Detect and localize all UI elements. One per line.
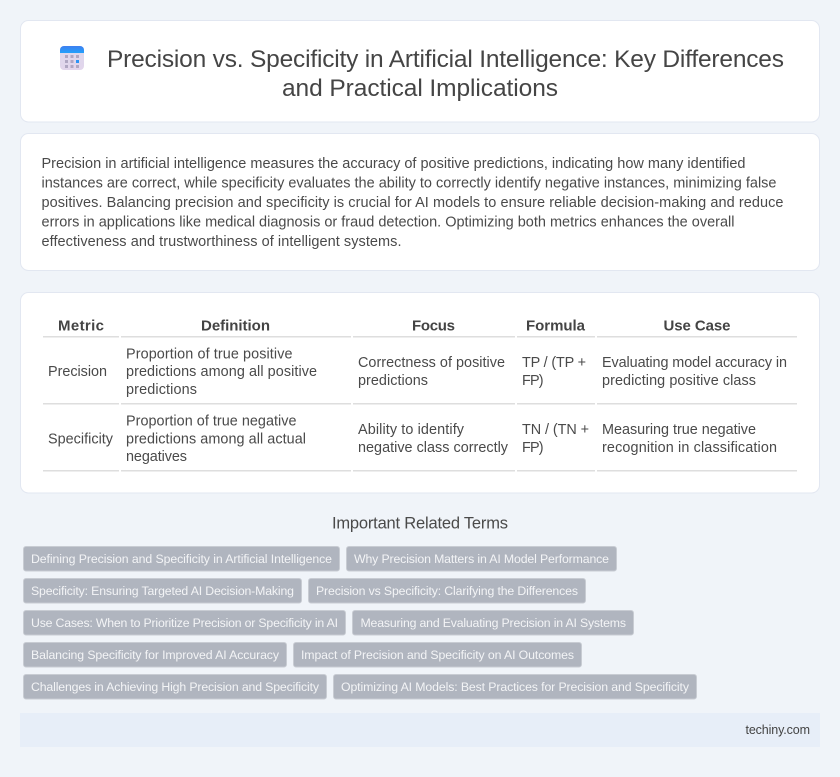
tag row 5: Optimizing AI Models: Best Practices for Precision and Specificity [341, 680, 690, 694]
table row: precision: Proportion of true positive [126, 346, 292, 362]
text block: summary [42, 156, 784, 250]
table header: Metric [58, 318, 104, 335]
table row: specificity: recognition in classification [602, 440, 777, 456]
table row: precision: Precision [48, 364, 107, 380]
table row: specificity: Measuring true negative [602, 422, 756, 438]
title [107, 46, 784, 102]
table row: precision: predictions among all positive [126, 364, 317, 380]
tag row 2 [24, 578, 586, 603]
title: Precision vs. Specificity in Artificial Intelligence: Key Differences [107, 46, 784, 73]
footer bar [20, 713, 820, 747]
tag row 1: Defining Precision and Specificity in Artificial Intelligence [31, 552, 332, 566]
table row: specificity: Proportion of true negative [126, 413, 296, 429]
table row: precision: predictions [358, 373, 428, 389]
text block: summary: effectiveness and trustworthiness of intelligent systems. [42, 234, 402, 250]
table header: Use Case [664, 318, 730, 335]
tag row 1 [24, 546, 616, 571]
panel: comparison table [20, 292, 820, 493]
table row: precision: predicting positive class [602, 373, 756, 389]
related term tags [24, 546, 696, 699]
tag row 4: Balancing Specificity for Improved AI Accuracy [31, 648, 280, 662]
table row: precision: predictions [126, 382, 197, 398]
text block: summary: instances are correct, while specificity evaluates the ability to correctly identify negative instances, minimizing false [42, 176, 776, 192]
tag row 3 [24, 610, 634, 635]
table header: Focus [412, 318, 455, 335]
table row: precision: Correctness of positive [358, 355, 505, 371]
table row: specificity: negative class correctly [358, 440, 509, 456]
table row: precision: Evaluating model accuracy in [602, 355, 787, 371]
tag row 3: Measuring and Evaluating Precision in AI Systems [360, 616, 626, 630]
footer source: techiny.com [746, 723, 810, 737]
tag row 5: Challenges in Achieving High Precision and Specificity [31, 680, 320, 694]
tag row 5 [24, 674, 696, 699]
title: and Practical Implications [282, 75, 558, 102]
heading: related terms: Important Related Terms [332, 515, 508, 533]
table header: Formula [526, 318, 586, 335]
tag row 2: Precision vs Specificity: Clarifying the Differences [316, 584, 578, 598]
table row: specificity: FP) [522, 440, 544, 456]
tag row 1: Why Precision Matters in AI Model Performance [354, 552, 609, 566]
panel: title header [20, 20, 820, 122]
table row: precision: FP) [522, 373, 544, 389]
tag row 2: Specificity: Ensuring Targeted AI Decision-Making [31, 584, 294, 598]
table header [43, 318, 797, 338]
table header: Definition [201, 318, 270, 335]
table row: precision [43, 346, 797, 404]
tag row 4: Impact of Precision and Specificity on AI Outcomes [301, 648, 574, 662]
text block: summary: positives. Balancing precision and specificity is crucial for AI models to ensure reliable decision-making and reduce [42, 195, 784, 211]
text block: summary: Precision in artificial intelligence measures the accuracy of positive predictions, indicating how many identified [42, 156, 746, 172]
table row: precision: TP / (TP + [522, 355, 586, 371]
table row: specificity: predictions among all actual [126, 431, 306, 447]
table row: specificity: Specificity [48, 431, 114, 447]
text block: summary: errors in applications like medical diagnosis or fraud detection. Optimizing both metrics enhances the overall [42, 214, 734, 230]
panel: summary paragraph [20, 134, 820, 270]
table row: specificity: Ability to identify [358, 422, 465, 438]
table row: specificity: TN / (TN + [522, 422, 589, 438]
table row: specificity [43, 413, 797, 472]
table row: specificity: negatives [126, 449, 187, 465]
icon: calendar grid [60, 46, 84, 70]
tag row 4 [24, 642, 582, 667]
tag row 3: Use Cases: When to Prioritize Precision or Specificity in AI [31, 616, 338, 630]
